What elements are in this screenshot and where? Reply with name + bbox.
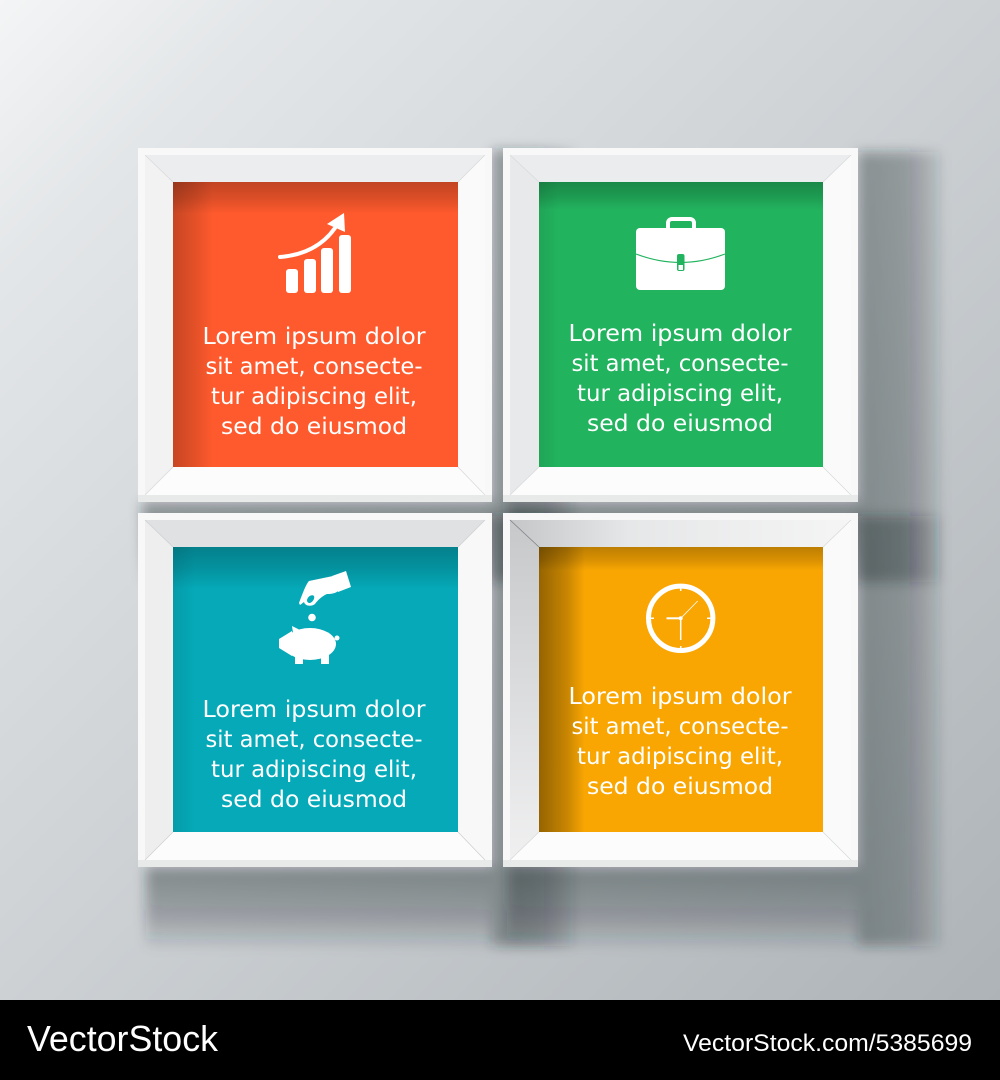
icon: clock bbox=[648, 586, 713, 651]
text block: tur adipiscing elit, bbox=[211, 757, 417, 783]
text block: sed do eiusmod bbox=[221, 414, 407, 440]
panel: bottom-right clock bbox=[503, 513, 858, 867]
panel: top-left growth bbox=[138, 148, 492, 502]
text block: Lorem ipsum dolor bbox=[202, 324, 426, 350]
icon: hand dropping coin into piggy bank bbox=[279, 571, 351, 664]
text block bbox=[202, 697, 426, 813]
text block bbox=[568, 321, 792, 437]
colour panel red bbox=[173, 182, 458, 467]
text block: sed do eiusmod bbox=[221, 787, 407, 813]
icon: bar chart with rising arrow bbox=[280, 213, 351, 293]
text block: tur adipiscing elit, bbox=[211, 384, 417, 410]
text block: sit amet, consecte- bbox=[206, 354, 422, 380]
text block bbox=[568, 684, 792, 800]
frame bottom-left bbox=[138, 513, 492, 867]
colour panel green bbox=[539, 182, 823, 467]
footer bar bbox=[0, 1000, 1000, 1080]
text block: tur adipiscing elit, bbox=[577, 381, 783, 407]
text block: sed do eiusmod bbox=[587, 774, 773, 800]
text block: Lorem ipsum dolor bbox=[568, 321, 792, 347]
text block: sit amet, consecte- bbox=[572, 714, 788, 740]
text block: Lorem ipsum dolor bbox=[568, 684, 792, 710]
text block: sit amet, consecte- bbox=[206, 727, 422, 753]
frame bottom-right bbox=[503, 513, 858, 867]
colour panel orange bbox=[539, 547, 823, 832]
brand name: VectorStock bbox=[27, 1018, 219, 1059]
frame shadows bbox=[142, 150, 940, 947]
text block: Lorem ipsum dolor bbox=[202, 697, 426, 723]
colour panel teal bbox=[173, 547, 458, 832]
panel: bottom-left piggy bank bbox=[138, 513, 492, 867]
panel: top-right briefcase bbox=[503, 148, 858, 502]
text block bbox=[202, 324, 426, 440]
frame top-right bbox=[503, 148, 858, 502]
text block: sit amet, consecte- bbox=[572, 351, 788, 377]
icon: briefcase bbox=[636, 219, 725, 290]
image reference url: VectorStock.com/5385699 bbox=[683, 1030, 972, 1057]
frame top-left bbox=[138, 148, 492, 502]
text block: sed do eiusmod bbox=[587, 411, 773, 437]
text block: tur adipiscing elit, bbox=[577, 744, 783, 770]
